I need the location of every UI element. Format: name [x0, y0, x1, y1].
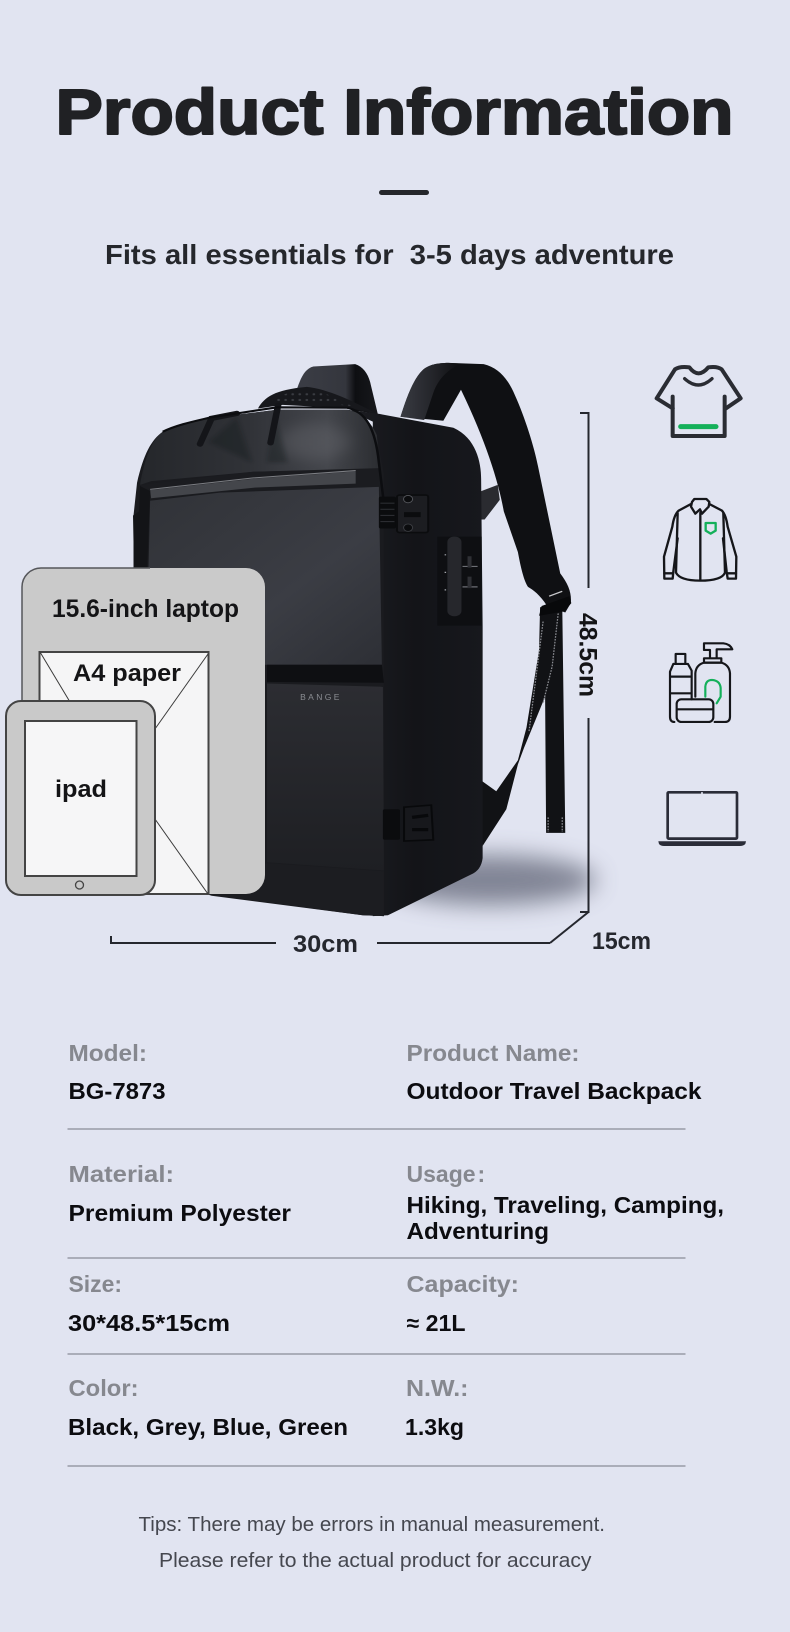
laptop label: 15.6-inch laptop: [52, 595, 239, 623]
title: Product Information: [56, 76, 734, 148]
lower buckle: [383, 805, 433, 841]
mesh top handle: [258, 387, 377, 413]
spec: capacity: [406, 1271, 519, 1336]
spec: product name: Product Name:: [406, 1040, 580, 1066]
icon: toiletries: [670, 643, 732, 722]
base panel: [212, 863, 384, 916]
zipper highlight: [150, 471, 356, 489]
ipad screen: [25, 721, 136, 876]
strap stitching: [529, 613, 562, 832]
paper diagonals: [40, 652, 208, 894]
ipad label: ipad: [55, 776, 107, 803]
slider highlight: [549, 591, 562, 596]
ipad body: [6, 701, 155, 895]
spec: product name: Outdoor Travel Backpack: [406, 1078, 702, 1104]
zipper strip: [150, 471, 356, 498]
footnote: [138, 1513, 605, 1572]
spec: capacity: ≈ 21L: [406, 1310, 466, 1336]
laptop outline: [22, 568, 265, 894]
A4 paper panel: [40, 652, 208, 894]
carbon front panel: [146, 487, 382, 666]
backpack photo illustration: [133, 363, 571, 916]
spec: model: Model:: [68, 1040, 147, 1066]
footnote: Tips: There may be errors in manual measurement.: [138, 1513, 605, 1536]
icon: laptop: [658, 792, 746, 846]
shadow under zip pulls: [209, 413, 287, 462]
spec: product name: [406, 1040, 702, 1104]
spec: net weight: N.W.:: [406, 1375, 468, 1401]
backpack body front base: [134, 410, 384, 916]
spec: model: [68, 1040, 166, 1104]
icon: t-shirt: [657, 367, 741, 436]
spec: material: Material:: [68, 1161, 174, 1187]
depth label: 15cm: [592, 928, 651, 955]
top piping seam: [163, 407, 384, 503]
spec: color: Color:: [68, 1375, 138, 1401]
upper buckle: [379, 495, 428, 533]
spec: usage: Usage:: [406, 1161, 485, 1187]
zip pull tabs: [200, 405, 278, 444]
combination lock: [437, 537, 482, 626]
spec: net weight: 1.3kg: [405, 1414, 464, 1440]
spec: material: Premium Polyester: [68, 1200, 291, 1226]
lower hanging strap: [479, 604, 565, 846]
mesh texture: [272, 390, 353, 406]
spec: usage: Adventuring: [406, 1218, 549, 1244]
right shoulder strap: [401, 363, 571, 613]
dimension: depth: [550, 912, 651, 955]
spec: usage: [406, 1161, 724, 1244]
spec: size: Size:: [68, 1271, 122, 1297]
spec table: [68, 1040, 724, 1467]
width label: 30cm: [293, 931, 358, 958]
top leather panel: [140, 410, 380, 485]
side connector strap: [479, 485, 500, 520]
ipad panel: [6, 701, 155, 895]
dimension: width: [111, 931, 550, 958]
spec: color: Black, Grey, Blue, Green: [68, 1414, 348, 1440]
subtitle: Fits all essentials for 3-5 days adventure: [105, 239, 674, 270]
laptop size panel: [22, 568, 265, 894]
paper label: A4 paper: [73, 660, 181, 687]
dimension: height: [574, 413, 602, 912]
lower front pocket: [267, 684, 384, 870]
footnote: Please refer to the actual product for accuracy: [159, 1549, 592, 1572]
height line: [580, 413, 588, 912]
strap slider: [539, 596, 571, 616]
spec: model: BG-7873: [68, 1078, 166, 1104]
strap upper lighter part: [401, 363, 461, 420]
middle dark band: [267, 665, 384, 683]
back left shoulder strap: [297, 364, 378, 414]
width line: [111, 936, 550, 943]
spec: size: 30*48.5*15cm: [68, 1310, 230, 1336]
paper sheet: [40, 652, 208, 894]
laptop top edge: [22, 568, 150, 890]
title divider: [379, 190, 429, 195]
spec: net weight: [405, 1375, 468, 1440]
ipad home button: [76, 881, 84, 889]
floor shadow: [384, 855, 596, 905]
backpack body side: [347, 410, 483, 916]
spec: material: [68, 1161, 291, 1226]
spec: usage: Hiking, Traveling, Camping,: [406, 1192, 724, 1218]
top leather sheen: [280, 424, 350, 460]
depth line: [550, 912, 588, 943]
left side zip pull: [133, 486, 150, 568]
brand label: BANGE: [300, 692, 342, 702]
height label: 48.5cm: [574, 613, 602, 697]
spec: color: [68, 1375, 348, 1440]
zipper band: [140, 468, 380, 500]
spec: capacity: Capacity:: [406, 1271, 519, 1297]
spec: size: [68, 1271, 230, 1336]
icon: shirt: [664, 499, 736, 581]
